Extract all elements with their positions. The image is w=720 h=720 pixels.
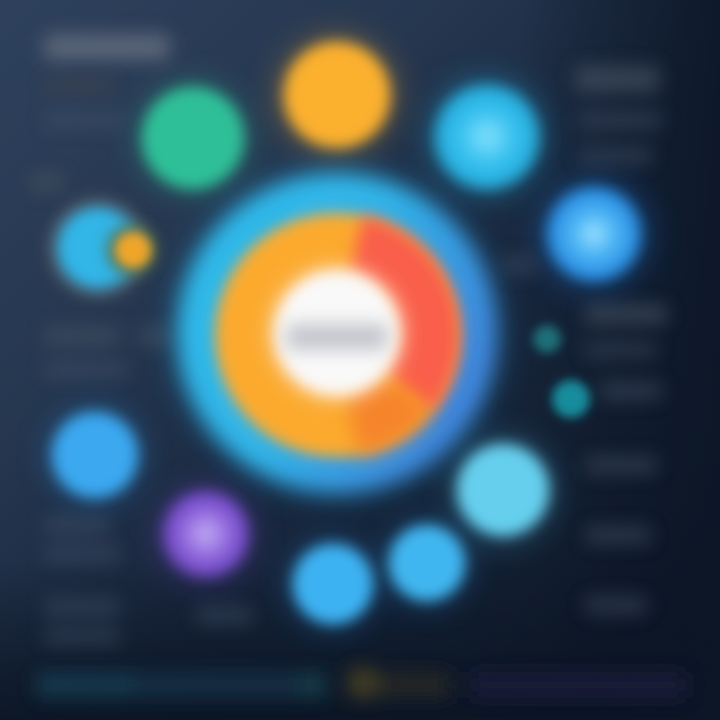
central ring chart [169, 165, 505, 501]
circle: blue bottom left of pair [287, 538, 379, 630]
left column text placeholders [30, 78, 252, 644]
circle: blue right [538, 178, 650, 290]
small teal dot lower [552, 380, 590, 418]
outer blue ring [178, 174, 496, 492]
pie icon: left cyan and orange [46, 196, 158, 300]
circle: purple [156, 484, 256, 584]
orange ring [215, 213, 459, 457]
red wedge [337, 216, 459, 412]
outer glow [169, 165, 505, 501]
circle: pale cyan lower right [449, 436, 557, 544]
white centre [277, 273, 397, 393]
circle: blue bottom right of pair [383, 519, 471, 607]
centre halo [271, 267, 403, 399]
circle: blue lower left [45, 405, 145, 505]
heading placeholder [44, 34, 170, 60]
circle: orange top [277, 35, 397, 155]
small teal dot upper [533, 325, 561, 353]
circle: green [135, 80, 251, 196]
bottom legend bar [36, 668, 686, 698]
circle: sky top right [427, 77, 547, 197]
deep orange wedge [337, 335, 432, 455]
right column text placeholders [502, 66, 667, 614]
centre label placeholder [286, 324, 388, 350]
